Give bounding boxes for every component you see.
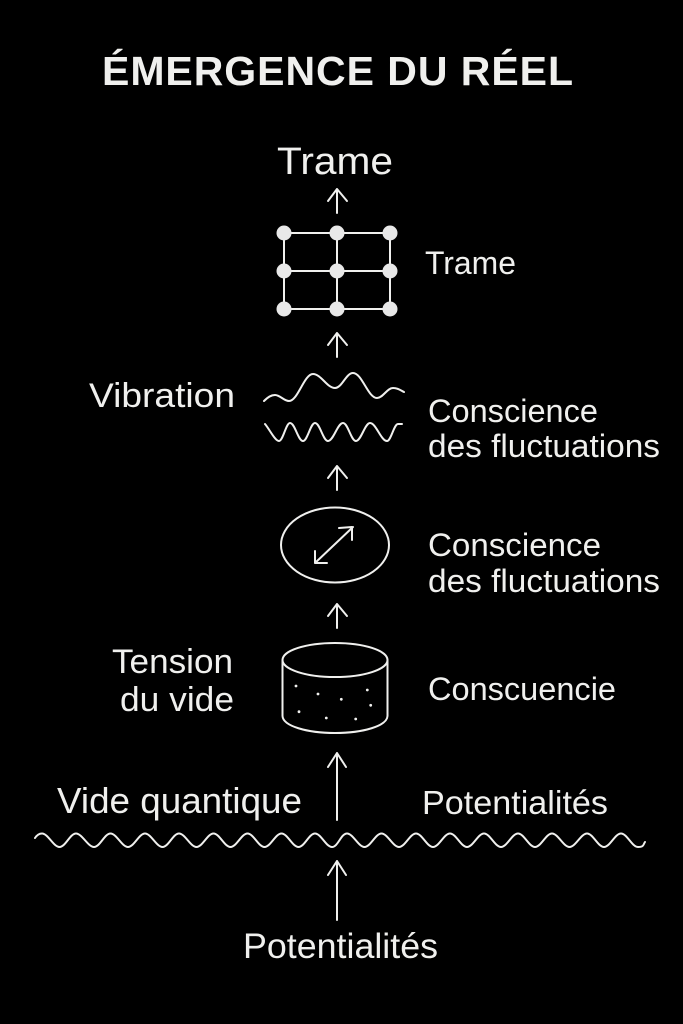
wave line: quantum vacuum <box>35 834 645 847</box>
icon: cylinder <box>282 643 388 733</box>
label: Tension du vide: du vide <box>120 681 234 719</box>
label: Conscience des fluctuations (upper): Conscience <box>428 393 598 429</box>
label: Conscuencie: Conscuencie <box>428 671 616 707</box>
label: Conscience des fluctuations (lower): des fluctuations <box>428 563 660 599</box>
label: Tension du vide: Tension <box>112 643 233 681</box>
label: Conscience des fluctuations (lower): Conscience <box>428 527 601 563</box>
arrow: ellipse to waves <box>328 466 347 490</box>
arrow: potentialities to wave line <box>328 861 346 920</box>
arrow: baseline to cylinder <box>328 753 346 820</box>
label: Potentialités right: Potentialités <box>422 784 608 821</box>
title: ÉMERGENCE DU RÉEL <box>102 48 573 94</box>
icon: grid <box>276 226 398 316</box>
label: Conscience des fluctuations (upper): des fluctuations <box>428 428 660 464</box>
icon: ellipse with double arrow <box>281 508 389 582</box>
arrow: waves to grid <box>328 333 347 357</box>
arrow: grid to top label <box>328 189 347 213</box>
top label: Trame: Trame <box>277 141 393 183</box>
icon: waves <box>264 373 404 441</box>
label: Trame right: Trame <box>425 245 516 281</box>
arrow: cylinder to ellipse <box>328 604 347 628</box>
label: Vibration: Vibration <box>89 377 235 415</box>
label: Vide quantique: Vide quantique <box>57 780 302 821</box>
bottom label: Potentialités: Potentialités <box>243 927 438 966</box>
